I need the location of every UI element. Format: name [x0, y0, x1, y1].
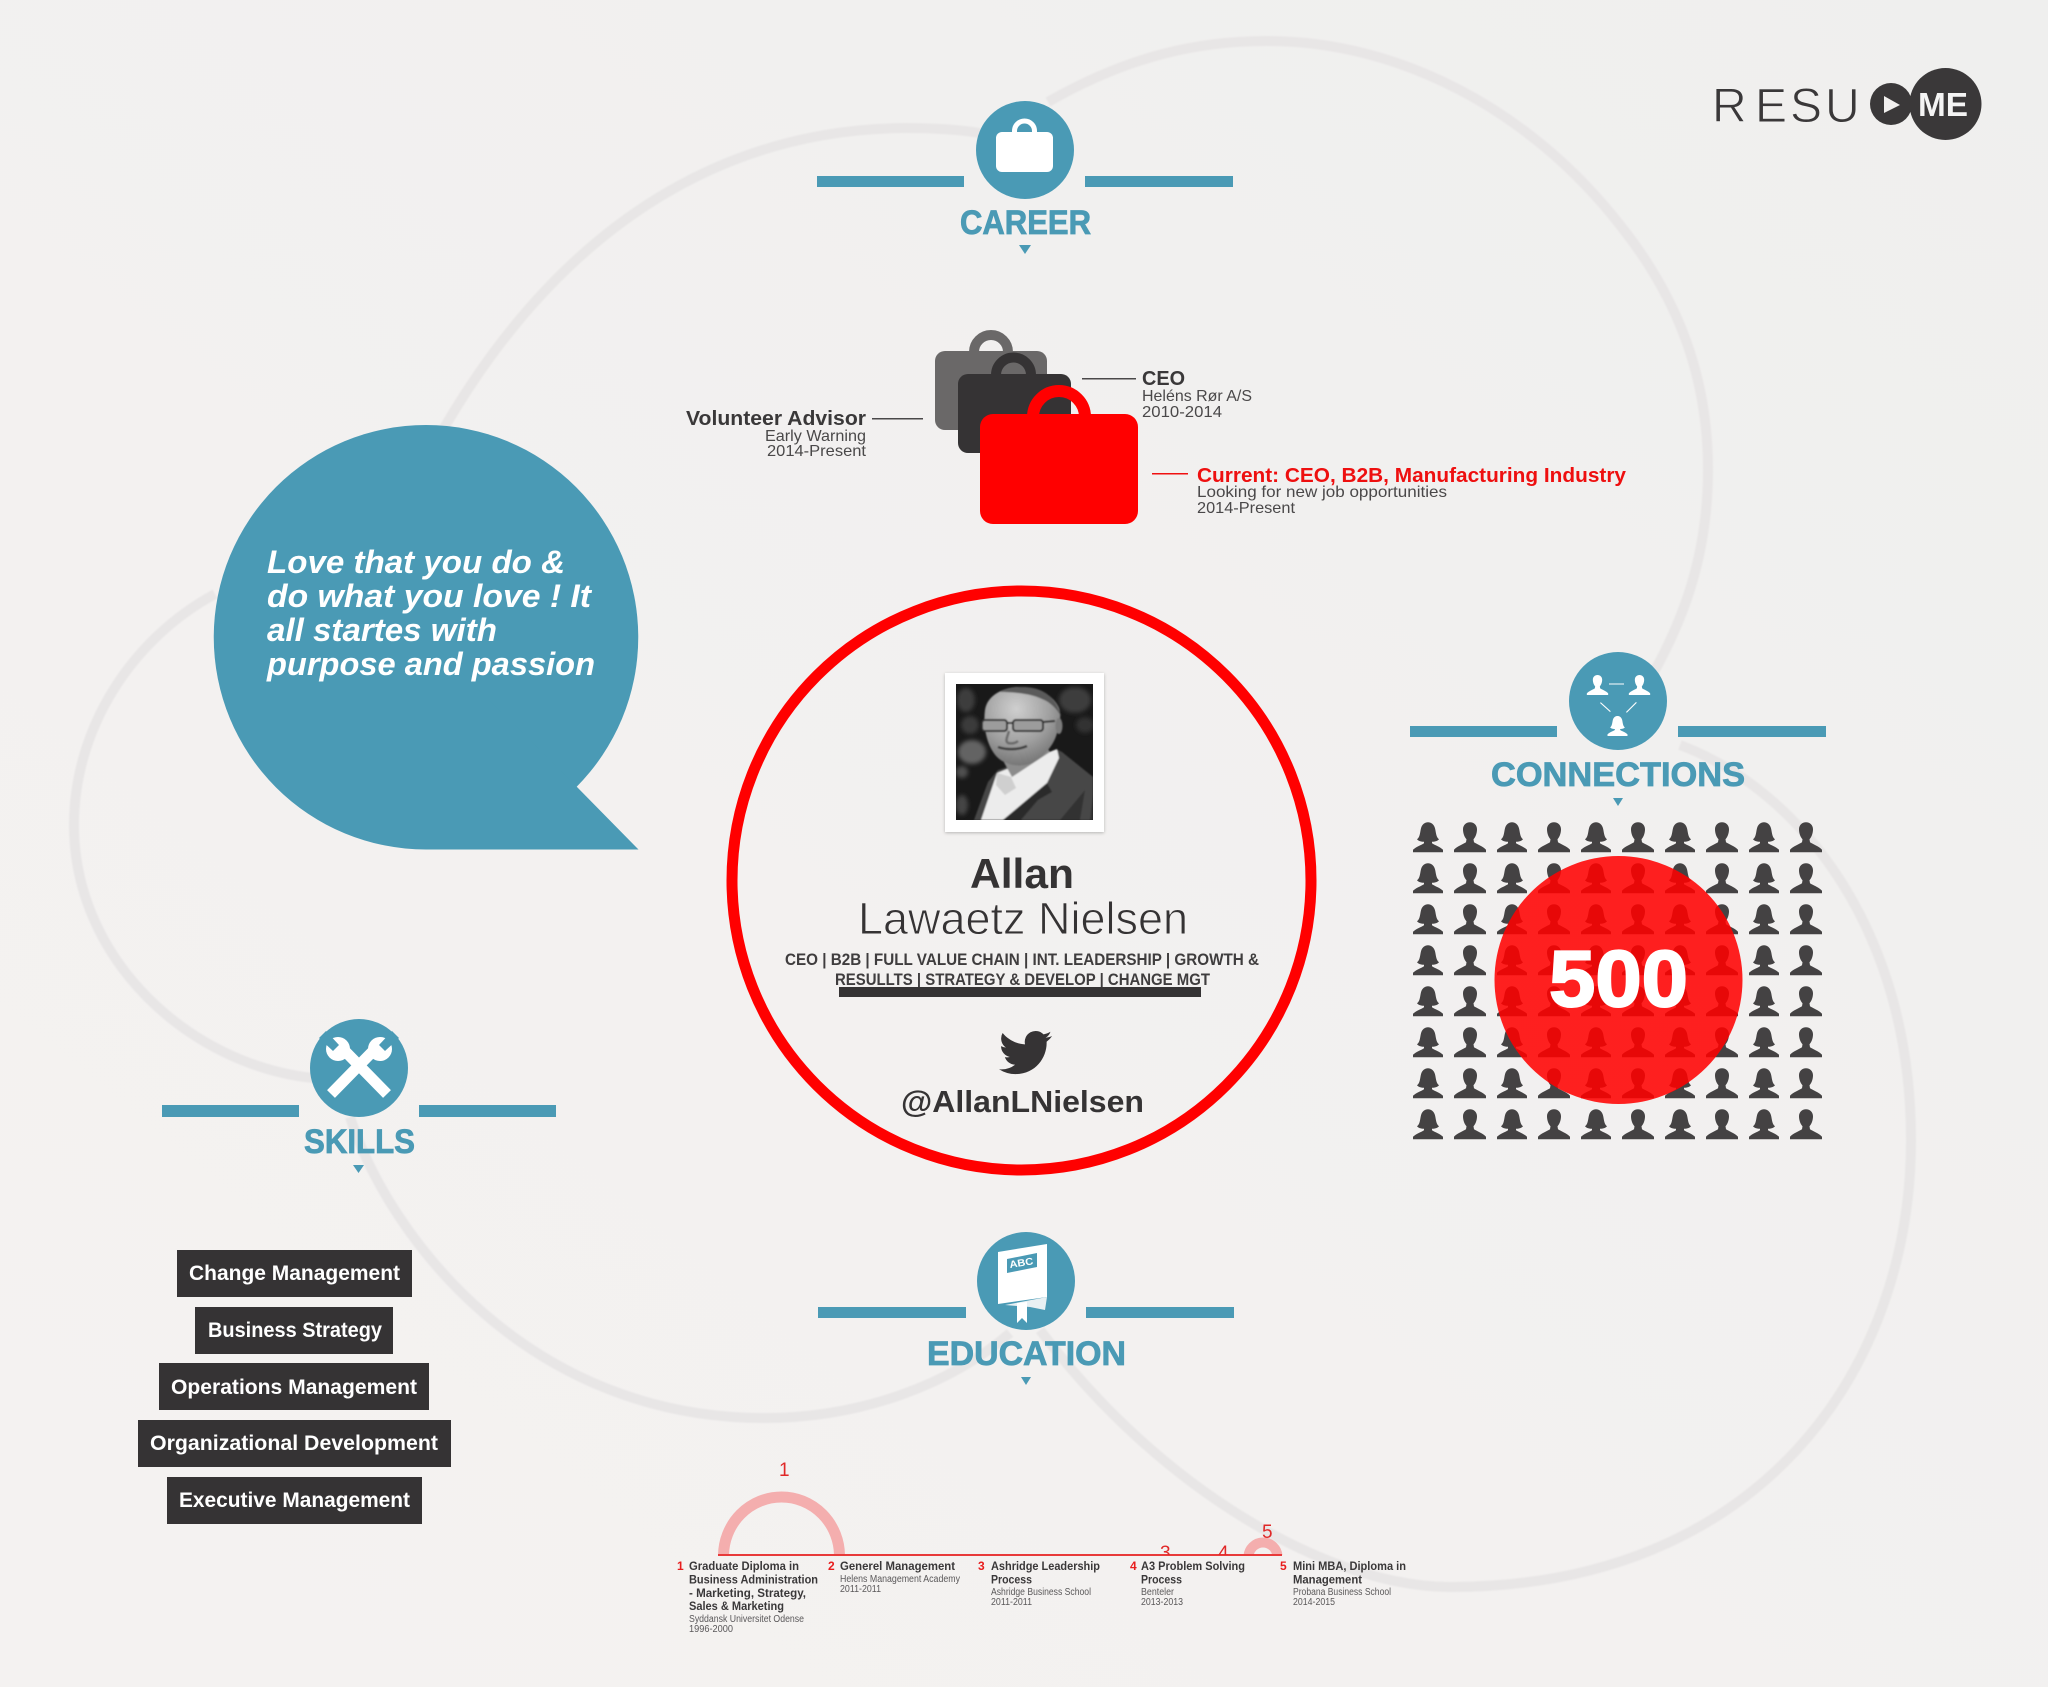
education timeline: 1: [779, 1460, 790, 1481]
career briefcases chart: [935, 335, 1138, 524]
education entry 5: Management: [1293, 1572, 1362, 1586]
section header: career: CAREER: [960, 204, 1091, 242]
skill tag: change management: Change Management: [189, 1262, 400, 1285]
career entry: CEO: [1082, 368, 1252, 421]
skill tag: operations management: Operations Management: [171, 1376, 417, 1399]
arc: mini MBA: [1244, 1538, 1282, 1555]
skill tag: operations management: [159, 1363, 429, 1410]
neck: [1003, 749, 1050, 778]
logo: RESUME: [1712, 68, 1982, 140]
red connections circle: 500: 500: [1549, 934, 1688, 1023]
hair: [1000, 687, 1061, 716]
education entry 4: A3 Problem Solving: [1141, 1559, 1245, 1573]
icon: book with ribbon: [998, 1244, 1047, 1323]
speech bubble quote: [214, 425, 638, 850]
education entry 2: Helens Management Academy: [840, 1574, 960, 1585]
education entry 1: Graduate Diploma in: [689, 1559, 799, 1573]
skill tag: organizational development: [138, 1420, 451, 1467]
education entry 4: 4: [1130, 1559, 1137, 1573]
education entry 3: 3: [978, 1559, 985, 1573]
education entry 3: Ashridge Leadership: [991, 1559, 1100, 1573]
education entry 3: Process: [991, 1572, 1032, 1586]
people grid: [1413, 822, 1822, 1139]
logo: RESUME: RESU: [1712, 80, 1860, 133]
icon: connected people: [1587, 675, 1650, 736]
skill tag: executive management: Executive Management: [179, 1489, 410, 1512]
section header: skills: SKILLS: [304, 1123, 415, 1161]
education entry 1: Syddansk Universitet Odense: [689, 1614, 804, 1625]
education entry 2: Generel Management: [840, 1559, 955, 1573]
section header: career: [817, 101, 1233, 254]
logo: RESUME: ME: [1918, 86, 1968, 123]
career entry: CEO: Heléns Rør A/S: [1142, 388, 1252, 405]
speech bubble quote: do what you love ! It: [267, 578, 592, 614]
red connections circle: 500: [1494, 856, 1742, 1104]
career entry: volunteer advisor: [686, 408, 923, 460]
section header: skills: [162, 1019, 556, 1173]
headline text: CEO | B2B | FULL VALUE CHAIN | INT. LEADERSHIP | GROWTH &: [785, 950, 1259, 969]
career entry: current: 2014-Present: [1197, 500, 1296, 517]
education entry 1: - Marketing, Strategy,: [689, 1586, 806, 1600]
name: Allan: Allan: [970, 850, 1074, 897]
education timeline: 4: [1218, 1543, 1229, 1564]
skill tag: organizational development: Organizational Development: [150, 1432, 438, 1455]
twitter handle: @AllanLNielsen: [901, 1084, 1144, 1119]
education timeline: 5: [1262, 1522, 1273, 1543]
name: Lawaetz Nielsen: Lawaetz Nielsen: [858, 893, 1188, 944]
foliage mottling: [956, 687, 1094, 815]
education entry 4: Process: [1141, 1572, 1182, 1586]
career entry: volunteer advisor: Volunteer Advisor: [686, 408, 866, 430]
career entry: current: Looking for new job opportunities: [1197, 484, 1447, 501]
icon: white briefcase: [996, 121, 1053, 172]
education entry 1: 1: [677, 1559, 684, 1573]
section header: connections: CONNECTIONS: [1491, 756, 1745, 794]
lapel: [1003, 783, 1052, 820]
section header: education: [818, 1232, 1234, 1385]
education entry 5: 2014-2015: [1293, 1597, 1335, 1608]
icon: book with ribbon: ABC: [1009, 1256, 1034, 1271]
career entry: volunteer advisor: 2014-Present: [767, 443, 867, 460]
glasses: [982, 720, 1043, 731]
career entry: volunteer advisor: Early Warning: [765, 428, 866, 445]
head: [984, 687, 1060, 765]
headline text: RESULLTS | STRATEGY & DEVELOP | CHANGE MGT: [835, 970, 1211, 989]
section header: connections: [1410, 652, 1826, 806]
education entry 2: 2: [828, 1559, 835, 1573]
education entry 5: Probana Business School: [1293, 1587, 1391, 1598]
icon: twitter bird: [999, 1031, 1052, 1074]
education entry 1: 1996-2000: [689, 1624, 733, 1635]
nose and mouth: [1006, 731, 1018, 743]
arc: graduate diploma: [718, 1492, 845, 1554]
education entry 3: [978, 1559, 1100, 1608]
education entry 2: [828, 1559, 960, 1595]
education entry 4: Benteler: [1141, 1587, 1175, 1598]
education entry 5: Mini MBA, Diploma in: [1293, 1559, 1406, 1573]
dark divider bar: [839, 987, 1201, 997]
education entry 5: [1280, 1559, 1406, 1608]
skill tag: executive management: [167, 1477, 422, 1524]
profile ring: [732, 591, 1311, 1170]
speech bubble quote: all startes with: [267, 612, 497, 648]
ear: [1056, 718, 1062, 734]
education entry 1: Sales & Marketing: [689, 1599, 784, 1613]
speech bubble quote: Love that you do &: [267, 544, 565, 580]
education entry 4: [1130, 1559, 1245, 1608]
education entry 5: 5: [1280, 1559, 1287, 1573]
education timeline: [718, 1462, 1282, 1556]
education entry 4: 2013-2013: [1141, 1597, 1183, 1608]
skill tag: business strategy: [195, 1307, 393, 1354]
education timeline: 3: [1160, 1543, 1171, 1564]
shirt: [981, 749, 1059, 820]
career entry: current: Current: CEO, B2B, Manufacturing Industry: [1197, 465, 1627, 487]
education entry 1: [677, 1559, 818, 1635]
skill tag: change management: [177, 1250, 412, 1297]
jacket: [974, 750, 1093, 820]
education entry 1: Business Administration: [689, 1572, 818, 1586]
career entry: current: [1152, 465, 1627, 517]
speech bubble quote: purpose and passion: [266, 646, 595, 682]
education entry 2: 2011-2011: [840, 1584, 881, 1595]
career entry: CEO: 2010-2014: [1142, 404, 1222, 421]
headline text: [785, 950, 1259, 989]
section header: education: EDUCATION: [927, 1335, 1126, 1373]
career entry: CEO: CEO: [1142, 368, 1185, 390]
profile photo: [945, 673, 1104, 832]
education entry 3: Ashridge Business School: [991, 1587, 1091, 1598]
icon: crossed wrenches: [319, 1031, 399, 1094]
education entry 3: 2011-2011: [991, 1597, 1032, 1608]
skill tag: business strategy: Business Strategy: [208, 1319, 382, 1342]
